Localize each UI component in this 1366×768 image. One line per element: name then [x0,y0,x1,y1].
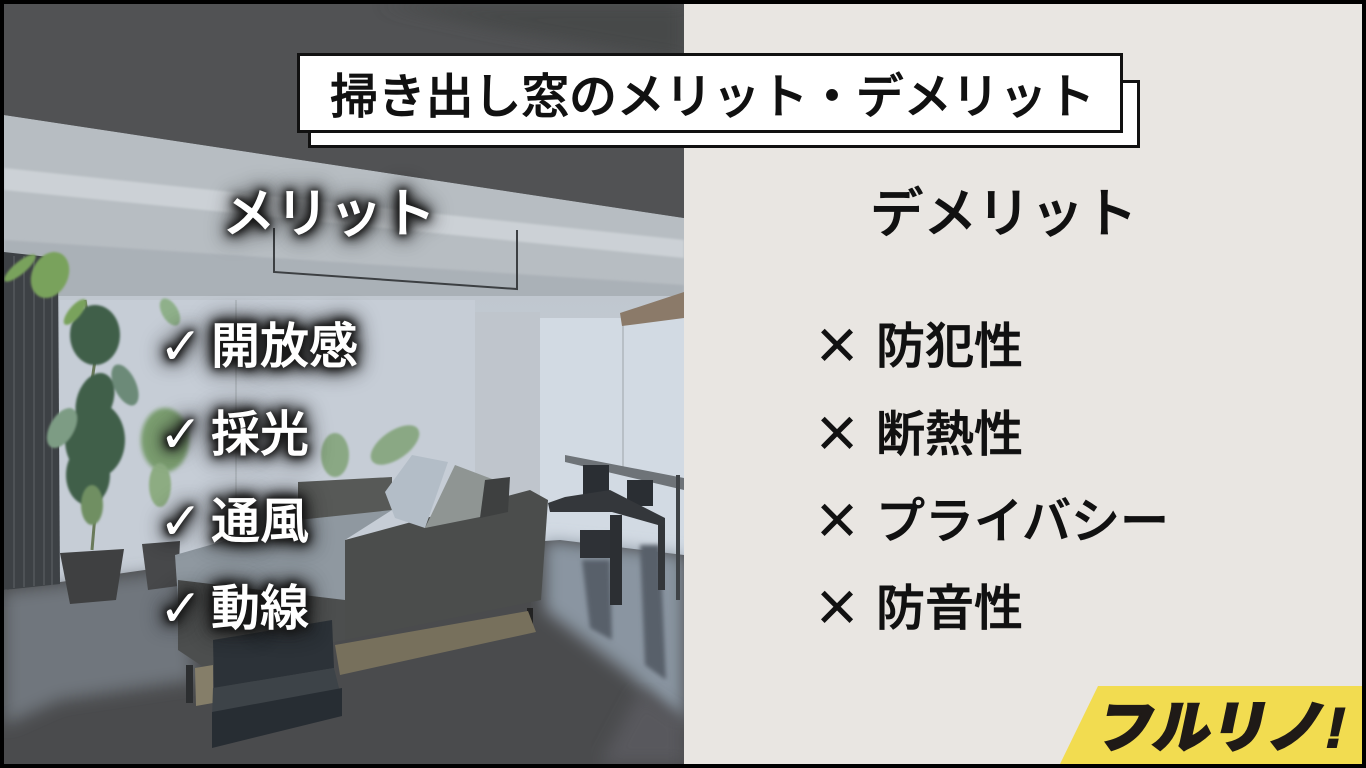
demerit: 断熱性 [816,393,1023,473]
title text: 掃き出し窓のメリット・デメリット [330,71,1095,124]
merit list: ✓ [159,492,203,552]
demerit: 断熱性: 断熱性 [876,408,1023,462]
title back plate [308,80,1140,148]
merit: 通風 [149,477,325,563]
demerit list: × [816,393,858,473]
demerit: プライバシー [816,480,1169,560]
merit list: ✓ [159,405,203,465]
large plant [1,246,184,604]
large plant pot [60,549,124,604]
panel: demerits background [684,4,1362,764]
demerit: プライバシー: プライバシー [876,495,1169,549]
heading: merits: メリット [222,185,436,244]
background plants [321,417,426,477]
bench and table [548,455,684,605]
demerit list: × [816,480,858,560]
beam recess [274,228,517,289]
merit: 開放感: 開放感 [211,320,358,374]
demerit list: × [816,305,858,385]
wooden box on wall [620,292,684,326]
title plate [297,53,1123,133]
demerit list [816,305,1169,647]
badge shape [1060,686,1362,764]
rug [335,611,536,675]
demerit: 防犯性 [816,305,1023,385]
ceiling [4,4,684,218]
heading: demerits: デメリット [870,185,1138,244]
merit: 動線 [152,566,326,644]
floor [4,540,684,764]
title block [297,53,1140,148]
merit: 動線: 動線 [211,582,309,636]
merit list: ✓ [159,317,203,377]
demerit: 防音性: 防音性 [876,582,1023,636]
small plant [141,408,189,590]
merit: 通風: 通風 [211,495,309,549]
demerit list: × [816,567,858,647]
demerit: 防犯性: 防犯性 [876,320,1023,374]
wall and beam [4,115,684,300]
merit: 採光 [150,390,326,476]
sofa [175,455,548,703]
merit list [149,302,376,644]
demerit: 防音性 [816,567,1023,647]
merit list: ✓ [159,579,203,639]
logo text: フルリノ! [1091,696,1352,759]
merit: 採光: 採光 [211,408,309,462]
curtain [4,252,60,590]
logo badge [1060,686,1362,764]
panel: interior photo [4,4,684,764]
windows [4,296,684,606]
merit: 開放感 [149,302,376,388]
floor reflections [582,545,666,680]
ottoman steps [212,620,342,748]
